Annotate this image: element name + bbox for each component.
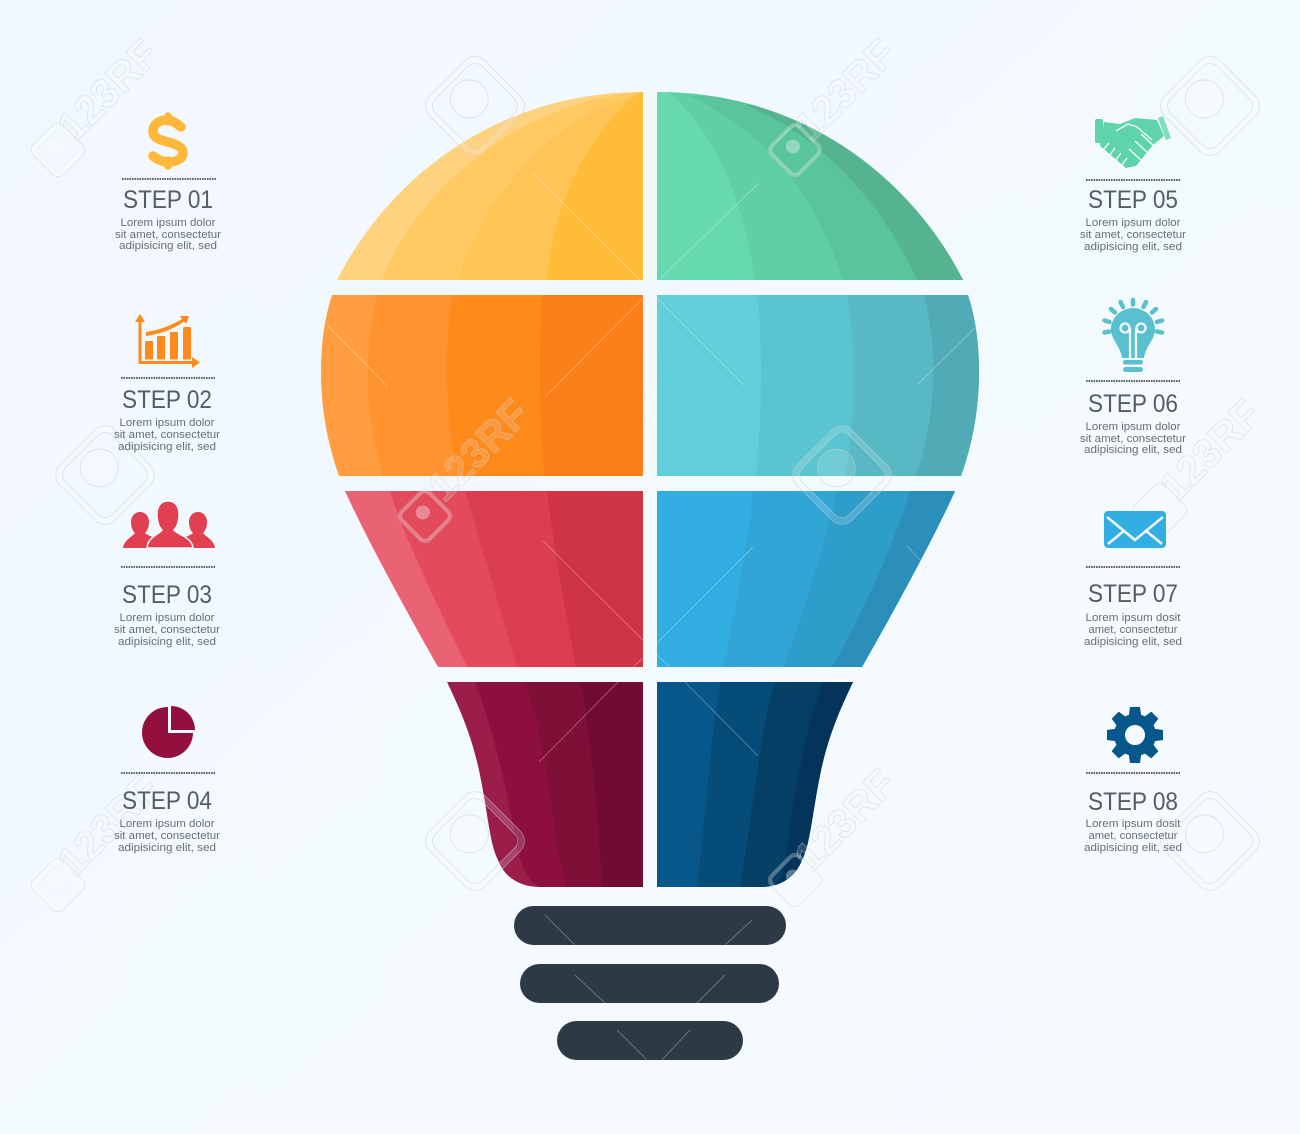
step 03 block: Lorem ipsum dolor bbox=[120, 612, 215, 624]
icon: light bulb with rays bbox=[1104, 300, 1162, 372]
step 04 block: Lorem ipsum dolor bbox=[120, 818, 215, 830]
step 06 block bbox=[1080, 300, 1186, 456]
step 05 block: adipisicing elit, sed bbox=[1084, 241, 1182, 253]
segment 8: navy bbox=[650, 680, 860, 890]
step 02 block: sit amet, consectetur bbox=[114, 429, 220, 441]
step 01 block: sit amet, consectetur bbox=[115, 229, 221, 241]
step 01 block: STEP 01 bbox=[123, 186, 213, 214]
step 04 block: adipisicing elit, sed bbox=[118, 842, 216, 854]
step 04 block: sit amet, consectetur bbox=[114, 830, 220, 842]
icon: dollar sign bbox=[153, 116, 183, 166]
icon: bar chart with arrow bbox=[135, 314, 200, 368]
step 04 block bbox=[114, 706, 220, 854]
step 02 block: adipisicing elit, sed bbox=[118, 441, 216, 453]
step 08 block: adipisicing elit, sed bbox=[1084, 842, 1182, 854]
watermark overlay: 123RF bbox=[785, 30, 905, 150]
step 04 block: STEP 04 bbox=[122, 787, 212, 815]
step 05 block: Lorem ipsum dolor bbox=[1086, 217, 1181, 229]
icon: gear bbox=[1107, 707, 1163, 763]
step 08 block bbox=[1084, 707, 1182, 854]
bulb glass: eight coloured segments bbox=[315, 85, 985, 890]
step 02 block bbox=[114, 314, 220, 453]
step 07 block: Lorem ipsum dosit bbox=[1086, 612, 1180, 624]
step 05 block: sit amet, consectetur bbox=[1080, 229, 1186, 241]
step 03 block: adipisicing elit, sed bbox=[118, 636, 216, 648]
step 02 block: STEP 02 bbox=[122, 386, 212, 414]
segment 2: orange bbox=[315, 290, 650, 480]
step 03 block: STEP 03 bbox=[122, 581, 212, 609]
step 08 block: Lorem ipsum dosit bbox=[1086, 818, 1180, 830]
icon: handshake bbox=[1095, 116, 1171, 168]
segment 7: blue bbox=[650, 488, 960, 670]
icon: group of people bbox=[123, 501, 215, 548]
segment 4: burgundy bbox=[440, 680, 650, 890]
step 06 block: STEP 06 bbox=[1088, 390, 1178, 418]
icon: pie chart bbox=[142, 706, 195, 758]
bulb base: three screw bars bbox=[514, 906, 786, 1060]
step 06 block: Lorem ipsum dolor bbox=[1086, 421, 1181, 433]
watermark overlay: 123RF bbox=[1150, 390, 1270, 510]
watermark overlay: 123RF bbox=[48, 30, 168, 150]
step 07 block: adipisicing elit, sed bbox=[1084, 636, 1182, 648]
step 02 block: Lorem ipsum dolor bbox=[120, 417, 215, 429]
segment 3: red bbox=[340, 488, 650, 670]
segment 1: yellow bbox=[337, 92, 643, 280]
step 07 block bbox=[1084, 511, 1182, 648]
step 07 block: amet, consectetur bbox=[1088, 624, 1178, 636]
icon: envelope bbox=[1104, 511, 1166, 548]
step 05 block: STEP 05 bbox=[1088, 186, 1178, 214]
step 07 block: STEP 07 bbox=[1088, 580, 1178, 608]
step 08 block: STEP 08 bbox=[1088, 788, 1178, 816]
segment 5: green bbox=[657, 92, 963, 280]
step 06 block: sit amet, consectetur bbox=[1080, 433, 1186, 445]
step 01 block: Lorem ipsum dolor bbox=[120, 217, 216, 229]
segment 6: teal bbox=[650, 290, 985, 480]
step 05 block bbox=[1080, 116, 1186, 253]
step 06 block: adipisicing elit, sed bbox=[1084, 444, 1182, 456]
step 08 block: amet, consectetur bbox=[1088, 830, 1178, 842]
step 03 block bbox=[114, 501, 220, 648]
watermark overlay: 123RF bbox=[48, 765, 168, 885]
watermark overlay: 123RF bbox=[418, 390, 538, 510]
step 01 block: adipisicing elit, sed bbox=[119, 240, 217, 252]
step 03 block: sit amet, consectetur bbox=[114, 624, 220, 636]
watermark overlay: 123RF bbox=[785, 760, 905, 880]
step 01 block bbox=[115, 116, 221, 252]
